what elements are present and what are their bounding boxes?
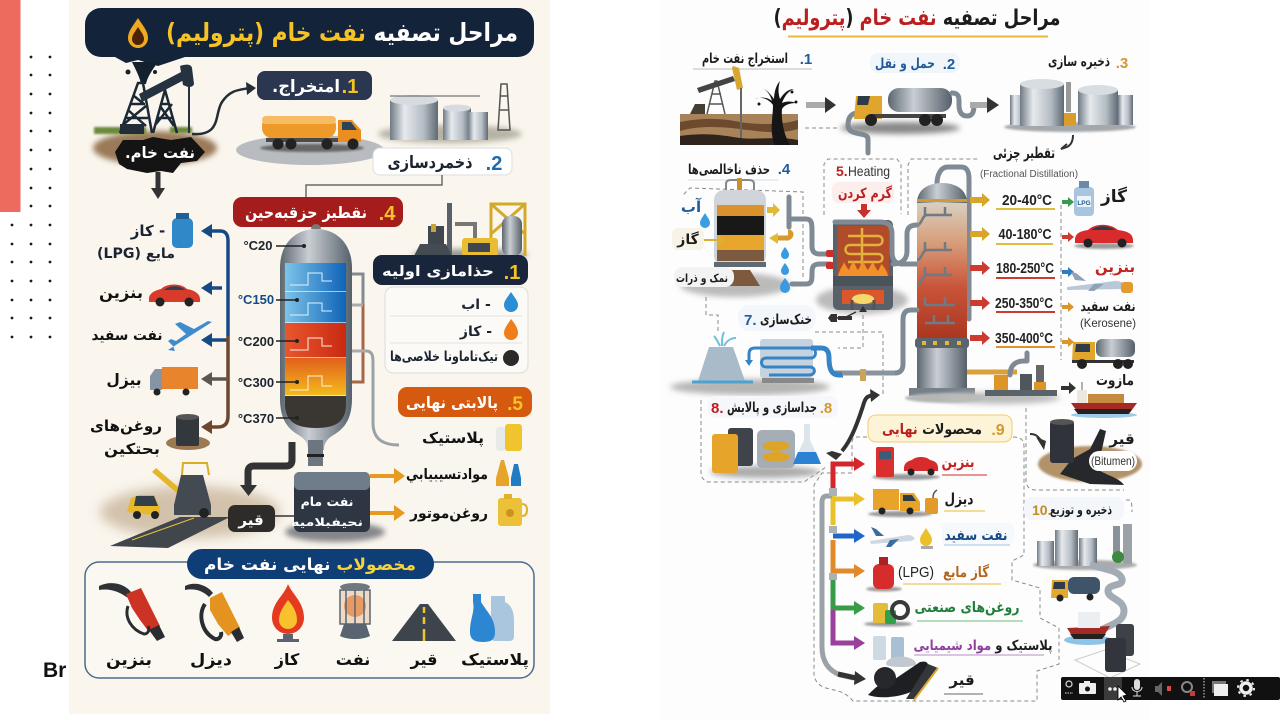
arrow: black pipe to bitumen [240,442,292,496]
arrow: furnace to cooling [828,312,856,322]
panel: final products: کاز [274,650,300,669]
panel: pre-treatment items [385,287,528,373]
step 8 refining: .8 [820,400,832,417]
temperature labels: °C150 [238,292,274,307]
product row: kerosene [870,523,1014,549]
arrow: double curved [826,389,880,460]
output: gas: گاز [1100,186,1127,207]
step 2 label: ذخمردسازی [388,153,473,173]
step 5 label: پالابتی نهایی [406,394,498,413]
product row: diesel [868,489,985,517]
gas label [672,228,704,250]
icon: pumpjack and gusher [680,66,798,145]
step 4 label: .4 [379,203,396,225]
step 7 cooling: 7. [744,312,757,329]
step 10 distribution: 10. [1032,502,1051,518]
panel: left infographic [69,0,550,714]
panel: final quality items: روغن‌موتور [409,506,488,522]
icon: cooling tower [670,332,830,395]
icon: storage tanks right [1004,79,1136,132]
panel: final products: قیر [410,650,437,669]
salt label [674,267,734,287]
step 4 label [233,197,403,227]
icon: motor oil can [498,494,527,526]
step 4 heading: .4 [778,161,791,178]
salmon accent bar [0,0,20,212]
step 8 refining: جداسازی و پالایش [727,400,817,416]
step 5 heating: 5. [836,163,848,179]
icon: orange tanker truck [260,116,364,152]
panel: final quality items [404,420,528,532]
output: plane [1067,272,1133,293]
output: kerosene: (Kerosene) [1080,316,1136,330]
step 1 extraction: .1 [800,51,812,68]
step 9 label: .9 [991,422,1005,439]
pipe: exchanger to column [811,348,895,381]
dashed link to column [908,159,980,215]
icon: utilities at column base [940,353,1060,404]
output: kerosene [1080,299,1136,330]
step 4 heading: حذف ناخالصی‌ها [688,162,770,178]
arrow: to bitumen [1030,434,1046,450]
salt label: نمک و ذرات [676,271,728,286]
arrow: down from crude oil [151,172,165,199]
output: gas: LPG [1077,200,1091,207]
water label [681,198,710,228]
step 5 heating [824,159,901,218]
icon: gray tanker truck and pipes [840,88,976,153]
temperature labels: °C370 [238,411,274,426]
icon: distribution ship [1064,612,1112,645]
small output arrows [1061,197,1076,394]
arrow: transport to storage [970,97,999,113]
product row: LPG: (LPG) [898,565,934,581]
dashed links [706,297,883,394]
icon: heat exchanger [745,339,816,383]
output: gas [1074,181,1127,216]
icon: more dots [1104,677,1122,700]
icon: bottles [496,424,522,451]
icon: chemical bottles [496,460,521,486]
step 10 distribution [1024,497,1132,520]
step 3 storage: .3 [1116,55,1128,72]
step 9 label: محصولات نهایی [882,422,982,438]
icon: storage tanks [378,84,522,143]
step 4 label: نقطیز حزقبه‌حین [245,203,367,222]
title: مراحل تصفیه نفت خام (پترولیم) [774,6,1060,31]
temperature labels [238,238,306,426]
residue tank: نحیفبلامیه [291,515,363,529]
arrow: curved to extraction [192,82,256,134]
left product: bitumen oil [90,414,210,458]
panel: final quality items: پلاستیک [422,429,484,448]
crude oil label blob [115,137,205,173]
pipes: desalter to furnace [769,197,840,284]
output: ship [1071,382,1137,418]
left product: diesel: بیزل [106,371,142,389]
output: kerosene: نفت سفید [1080,299,1136,315]
dashed link under extraction [805,127,837,129]
icon: furnace [816,220,918,314]
icon: barrels and flask [710,424,821,478]
impurity box outline [682,188,803,277]
icon: small flame [504,319,518,340]
fractional distillation heading [980,135,1078,180]
product row: diesel: دیزل [944,490,974,508]
panel: right infographic [660,0,1150,720]
final products header [187,549,434,579]
product row: kerosene: نفت سفید [944,528,1008,544]
step 5 label: .5 [507,394,523,415]
item: plastic bottles [470,594,514,642]
step 9 label [868,415,1012,442]
icon: distribution truck [1051,577,1100,602]
output: gasoline word: بنزین [1095,258,1135,276]
fractionating column [835,167,985,403]
oil column [280,224,352,466]
title banner [85,8,534,66]
product row: bitumen roll: قیر [948,671,975,689]
item: red nozzle [99,583,165,641]
step 2 transport: .2 [943,56,955,73]
icon: pipeline [1090,565,1124,631]
fractional distillation heading: تقطیر چزئی [993,144,1055,163]
icon: oil pump and ground [93,62,217,165]
step 7 cooling [738,305,816,331]
panel: pre-treatment items: تیک‌تاماونا خلاصی‌ها [390,349,498,365]
step 2 label: .2 [486,153,502,175]
step 3 pre-treatment label: حذامازی اولیه [382,264,494,280]
icon: windows [1212,681,1228,696]
icon: cursor [1118,686,1127,702]
step 5 heating: گرم کردن [838,185,893,202]
icon: water drop [504,292,518,312]
panel: final products: دیزل [190,650,232,669]
panel: pre-treatment items: - اب [461,297,491,313]
step 1 label: امتخراج. [272,77,340,97]
icon: pin [1065,681,1073,693]
step 1 label [257,71,372,100]
crude oil label blob: نفت خام. [125,144,195,162]
water drops [780,247,790,293]
temperature cuts: 40-180°C [998,227,1052,243]
icon: camera [1079,681,1096,694]
temperature cuts: 20-40°C [1002,193,1052,209]
left product: diesel [106,367,198,396]
pipes right of column [352,274,399,445]
item: gas flame [272,584,304,642]
icon: microphone [1132,679,1142,696]
output: car [1074,225,1134,249]
left product: bitumen oil: روغن‌های [90,417,162,435]
products dashed outline [814,437,1059,701]
left product: gasoline [99,284,200,306]
icon: distribution tanks [1033,524,1137,570]
step 1 label: .1 [342,76,358,98]
icon: title flame [128,18,148,48]
icon: webcam muted [1182,682,1195,696]
final products header: مخصولاب نهایی نفت خام [204,555,416,575]
product row: plastics: پلاستیک و مواد شیمیایی [914,638,1052,654]
panel: pre-treatment items: - کاز [459,324,492,340]
step 10 distribution: ذخیره و توزیع [1050,503,1112,518]
icon: pre-treatment plant [412,203,528,261]
left product: bitumen oil: بحتکین [104,440,160,458]
temperature cuts [970,193,1061,360]
screen recorder toolbar [1061,677,1280,702]
bitumen label: قیر [237,511,264,529]
bitumen label [228,505,275,532]
product row: plastics [873,636,1052,667]
left product: kerosene: نفت سفید [92,328,162,344]
output: bitumen: (Bitumen) [1091,454,1135,468]
panel: final products [85,549,534,678]
gas label: گاز [676,231,700,248]
step 5 label [398,387,532,417]
product pipe with arrows [201,224,228,434]
icon: speaker muted [1155,682,1171,696]
product row: LPG [866,557,1001,592]
connector from step 2 to step 4 [306,175,442,198]
product pipes and coloured arrows [822,457,866,685]
left product: kerosene [92,321,212,351]
temperature cuts: 250-350°C [995,296,1053,312]
road ellipse [236,135,384,165]
step 3 pre-treatment label: .1 [504,262,520,284]
temperature labels: °C300 [238,375,274,390]
product row: gasoline [872,447,987,480]
separator [1203,678,1205,699]
step 2 label [373,148,512,175]
step 8 refining [701,396,838,482]
output: bitumen: قیر [1108,430,1135,448]
item: kerosene heater [340,583,370,639]
product row: industrial oils: روغن‌های صنعتی [914,600,1020,616]
residue tank [285,472,385,542]
arrows: residue to products [370,468,405,521]
step 8 refining: 8. [711,400,724,417]
product row: bitumen roll [868,662,983,700]
step 3 storage: ذخیره سازی [1048,54,1110,70]
arrow: extraction to transport [806,97,836,113]
product row: industrial oils [864,600,1023,626]
panel: final products: نفت [336,650,370,669]
temperature labels: °C200 [238,334,274,349]
item: orange nozzle [185,584,244,642]
panel: final products: پلاستیک [461,650,529,670]
fractional distillation heading: (Fractional Distillation) [980,169,1078,180]
item: road [392,604,456,641]
step 2 transport [870,53,960,73]
step 2 transport: حمل و نقل [875,56,935,72]
output: mazut: مازوت [1096,373,1134,389]
left product: LPG [97,213,193,262]
left product: LPG: - کاز [130,222,165,240]
cut-off slide word: Br [43,659,66,682]
output: bitumen [1026,408,1142,490]
title banner: مراحل تصفیه نفت خام (پترولیم) [166,18,518,48]
left product: LPG: مایع (LPG) [97,246,175,262]
left product: gasoline: بنزین [99,284,143,302]
panel: final quality items: موادتسیبیابي [406,467,488,483]
product row: gasoline: بنزین [942,453,974,471]
step 3 pre-treatment label [373,255,528,285]
step 7 cooling: خنک‌سازی [760,312,812,328]
icon: dirt lump [503,350,519,366]
dot grid decoration [11,56,51,338]
temperature cuts: 180-250°C [996,261,1054,277]
residue tank: نفت مام [301,494,353,510]
icon: distribution barrels and map [1075,624,1140,678]
panel: final products: بنزین [106,650,152,669]
icon: gear [1238,680,1254,696]
temperature cuts: 350-400°C [995,331,1053,347]
output: tanker [1072,339,1135,369]
step 5 heating: Heating [848,163,890,179]
step 1 extraction: استخراج نفت خام [702,51,788,67]
water label: آب [681,198,702,216]
icon: road and asphalt paver [100,463,280,548]
icon: desalter vessel [680,178,790,297]
product row: LPG: گاز مایع [943,563,989,581]
temperature labels: °C20 [243,238,273,253]
